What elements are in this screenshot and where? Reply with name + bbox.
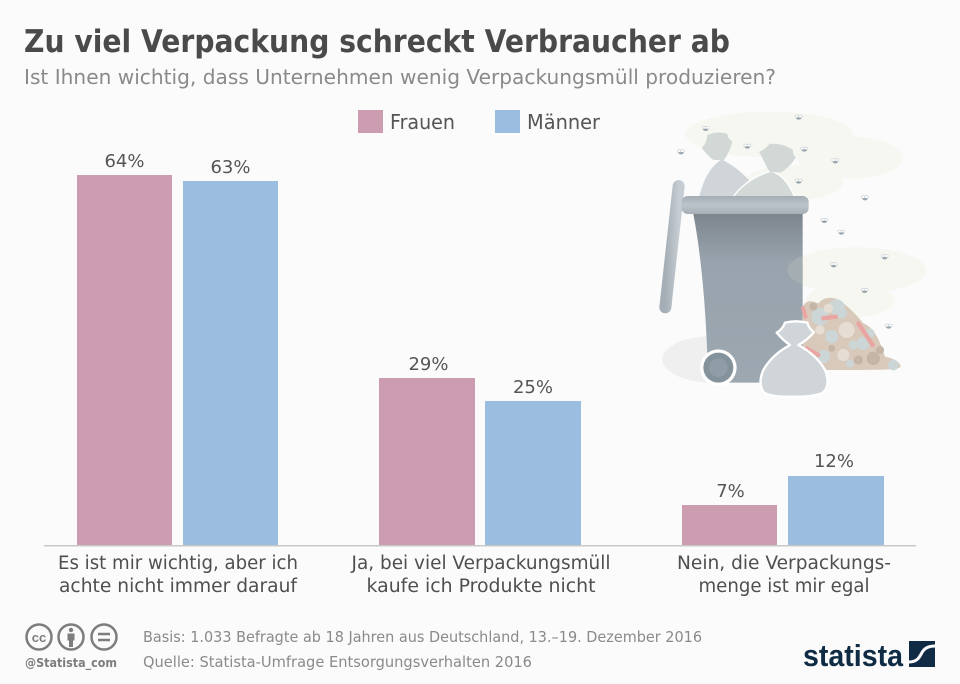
label: category 3: Nein, die Verpackungs-: [677, 553, 891, 574]
subtitle: Ist Ihnen wichtig, dass Unternehmen wenig Verpackungsmüll produzieren?: [24, 65, 776, 89]
front bag: [760, 321, 828, 397]
licence icons: [26, 624, 116, 650]
label: category 1: Es ist mir wichtig, aber ich: [58, 553, 298, 574]
cloud over bin: [788, 256, 802, 284]
label: category 3 line 2: menge ist mir egal: [698, 576, 870, 597]
wordmark: statista: [803, 638, 904, 673]
value labels: [104, 151, 251, 178]
ground shadow: [662, 336, 764, 383]
handle: [665, 186, 679, 307]
source: Quelle: Statista-Umfrage Entsorgungsverhalten 2016: [143, 653, 532, 671]
group: Nein: [682, 451, 884, 545]
category labels: [58, 553, 891, 597]
bar: Männer 25%: [485, 401, 581, 545]
statista logo: [803, 638, 935, 673]
group: Ja, bei viel Verpackungsmüll: [379, 354, 581, 545]
bar chart: [44, 151, 916, 546]
wheel: [700, 349, 737, 386]
label: category 2 line 2: kaufe ich Produkte nicht: [366, 576, 596, 597]
value labels: 12%: [814, 451, 854, 472]
title: Zu viel Verpackung schreckt Verbraucher ab: [24, 24, 730, 60]
value labels: 7%: [716, 481, 745, 502]
value labels: 63%: [210, 157, 251, 178]
bar: Frauen 29%: [379, 378, 475, 545]
bar: Frauen 64%: [77, 175, 172, 545]
bar: Frauen 7%: [682, 505, 777, 545]
icon: by: [58, 624, 84, 650]
garbage heap: [803, 298, 901, 370]
source note: [143, 628, 702, 671]
legend: Männer: [495, 110, 601, 134]
legend: [358, 110, 601, 134]
value labels: 64%: [104, 151, 145, 172]
legend: Männer: Männer: [527, 110, 601, 134]
value labels: [408, 354, 553, 398]
legend: Frauen: Frauen: [390, 110, 455, 134]
bar: Männer 12%: [788, 476, 884, 545]
back bags: [699, 133, 796, 197]
icon: cc: cc: [32, 630, 46, 645]
bar: Männer 63%: [183, 181, 278, 545]
legend: Frauen: [358, 110, 455, 134]
value labels: [716, 451, 854, 502]
label: category 1 line 2: achte nicht immer darauf: [59, 576, 297, 597]
illustration: overflowing trash bin: [662, 112, 926, 397]
value labels: 25%: [513, 377, 553, 398]
icon: nd: [92, 624, 116, 650]
rim: [682, 196, 809, 214]
flies: [677, 115, 892, 329]
label: category 2: Ja, bei viel Verpackungsmüll: [351, 553, 610, 574]
bin body: [693, 214, 803, 383]
value labels: 29%: [408, 354, 449, 375]
handle: @Statista_com: @Statista_com: [25, 656, 117, 671]
smell clouds: [686, 112, 926, 317]
basis: Basis: 1.033 Befragte ab 18 Jahren aus Deutschland, 13.–19. Dezember 2016: [143, 628, 702, 646]
group: Es ist mir wichtig: [77, 151, 278, 545]
logo mark: [909, 641, 935, 667]
